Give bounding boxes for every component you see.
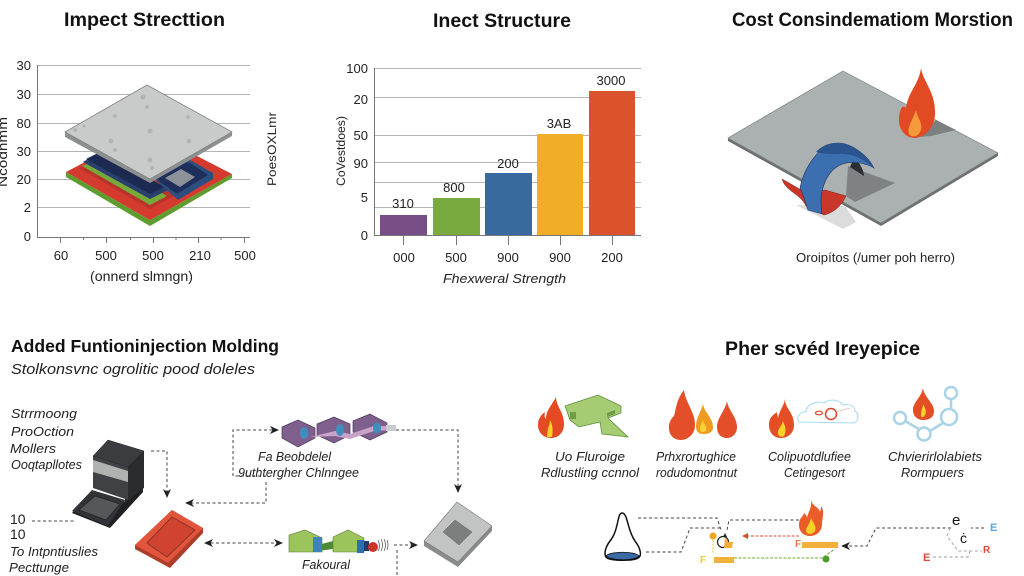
icon: green screw assembly [289,530,388,553]
y axis labels: 0 [24,229,31,244]
y axis labels: 50 [354,128,368,143]
label: screw assembly [238,449,359,480]
icon: grey press block [424,502,492,567]
y axis labels: 80 [17,116,31,131]
text block: bottom notes: 10 [10,526,26,542]
label: flame and network: Chvierirlolabiets [888,449,983,464]
x axis labels: 200 [601,250,623,265]
letters: right cluster: R [983,545,991,556]
icon: flame with green arrow [538,395,628,438]
text block: top notes: Mollers [10,441,57,456]
label: flame with arrow: Uo Fluroige [555,449,625,464]
icon: red mould plate [135,510,203,568]
y axis labels: 30 [17,58,31,73]
x axis caption: (onnerd slmngn) [90,269,193,284]
text block: top notes: Ooqtapllotes [11,457,82,472]
chart grid and axes [374,68,641,245]
bar value labels: 800 [443,180,465,195]
panel: added function flow diagram [9,336,492,576]
text block: bottom notes: To Intpntiuslies [10,544,98,559]
text block: top notes: Strrmoong [11,406,78,421]
y axis labels: 2 [24,200,31,215]
icon: flask [605,513,640,560]
label: flame and cloud: Colipuotdlufiee [768,449,851,464]
icon: flame and cloud [769,399,858,438]
x axis labels: 500 [445,250,467,265]
bar: red [589,91,635,235]
right axis title: PoesOXLmr [265,112,279,186]
text block: bottom notes: Pecttunge [9,560,69,575]
y axis labels: 100 [346,61,368,76]
x axis caption: Fhexweral Strength [443,271,566,286]
x axis labels [54,248,256,263]
label: flame with arrow: Rdlustling ccnnol [541,465,640,480]
text block: bottom notes [9,511,98,575]
bar value labels: 3AB [547,116,571,131]
bar: green [433,198,480,235]
panel: cost illustration [728,10,1013,265]
heading: Added Funtioninjection Molding [11,336,279,356]
caption: Oroipítos (/umer poh herro) [796,251,955,265]
label: three flames: Prhxrortughice [656,449,736,464]
y axis labels: 20 [354,92,368,107]
title: structure: Inect Structure [433,11,571,32]
y axis labels: 0 [361,228,368,243]
x axis labels [393,250,623,265]
title: impact: Impect Strecttion [64,10,225,31]
icon: yellow coil bottom [700,555,830,566]
y axis labels [17,58,31,244]
icon: grey top plate [65,85,232,183]
label: screw assembly: 9uthtergher Chlnngee [238,465,359,480]
label: three flames [656,449,738,480]
icon: bag marker [710,532,733,553]
y axis labels: 30 [17,144,31,159]
dashed arrows [32,430,458,576]
icon: flame and network [894,387,957,440]
label: flame and cloud: Cetingesort [784,465,846,480]
icon: grey sheet [728,71,998,229]
icon: flame [899,68,935,138]
icon: yellow coil bottom: F [700,555,706,566]
bar value labels: 3000 [597,73,625,88]
y axis labels: 20 [17,172,31,187]
text block: top notes [10,406,82,472]
y axis labels: 30 [17,87,31,102]
icon: purple screw assembly [282,414,396,447]
label: flame with arrow [541,449,640,480]
icon: injection machine [72,440,144,528]
y axis labels [346,61,368,243]
y axis labels: 5 [361,190,368,205]
label: three flames: rodudomontnut [656,465,738,480]
panel: structure bar chart [336,11,641,286]
x axis labels: 210 [189,248,211,263]
heading: Pher scvéd Ireyepice [725,339,920,360]
x axis labels: 60 [54,248,68,263]
bar value labels: 310 [392,196,414,211]
letters: right cluster [923,512,997,564]
bar: purple [380,215,427,235]
icon: orange coil top [795,539,838,550]
x axis labels: 500 [234,248,256,263]
subheading: Stolkonsvnc ogrolitic pood doleles [11,361,256,378]
label: screw assembly: Fa Beobdelel [258,449,332,464]
icon: small flame [799,500,823,536]
x axis labels: 900 [549,250,571,265]
y axis labels: 90 [354,156,368,171]
icon: orange coil top: F [795,539,801,550]
bar: blue [485,173,532,235]
text block: bottom notes: 10 [10,511,26,527]
flow lines [638,518,984,558]
letters: right cluster: e [952,512,960,529]
label: flame and cloud [768,449,851,480]
label: green assembly: Fakoural [302,557,351,572]
letters: right cluster: ċ [960,530,967,546]
text block: top notes: ProOction [11,424,74,439]
letters: right cluster: E [990,522,997,534]
panel: impact chart [0,10,279,284]
label: flame and network: Rormpuers [901,465,964,480]
bar: yellow [537,134,583,235]
title: cost: Cost Consindematiom Morstion [732,10,1013,31]
icon: layered composite stack [66,150,232,226]
x axis labels: 900 [497,250,519,265]
x axis labels: 000 [393,250,415,265]
icon: three flames [669,390,737,440]
label: flame and network [888,449,983,480]
letters: right cluster: E [923,552,930,564]
panel: properties icons [538,339,983,480]
bar value labels: 200 [497,156,519,171]
chart axes and grid [37,65,250,243]
y axis title: CoVestdoes) [336,116,348,186]
bar value labels [392,73,625,211]
x axis labels: 500 [95,248,117,263]
panel: process flow bottom right [605,500,997,566]
icon: blue curved arrow [782,143,874,215]
x axis labels: 500 [142,248,164,263]
